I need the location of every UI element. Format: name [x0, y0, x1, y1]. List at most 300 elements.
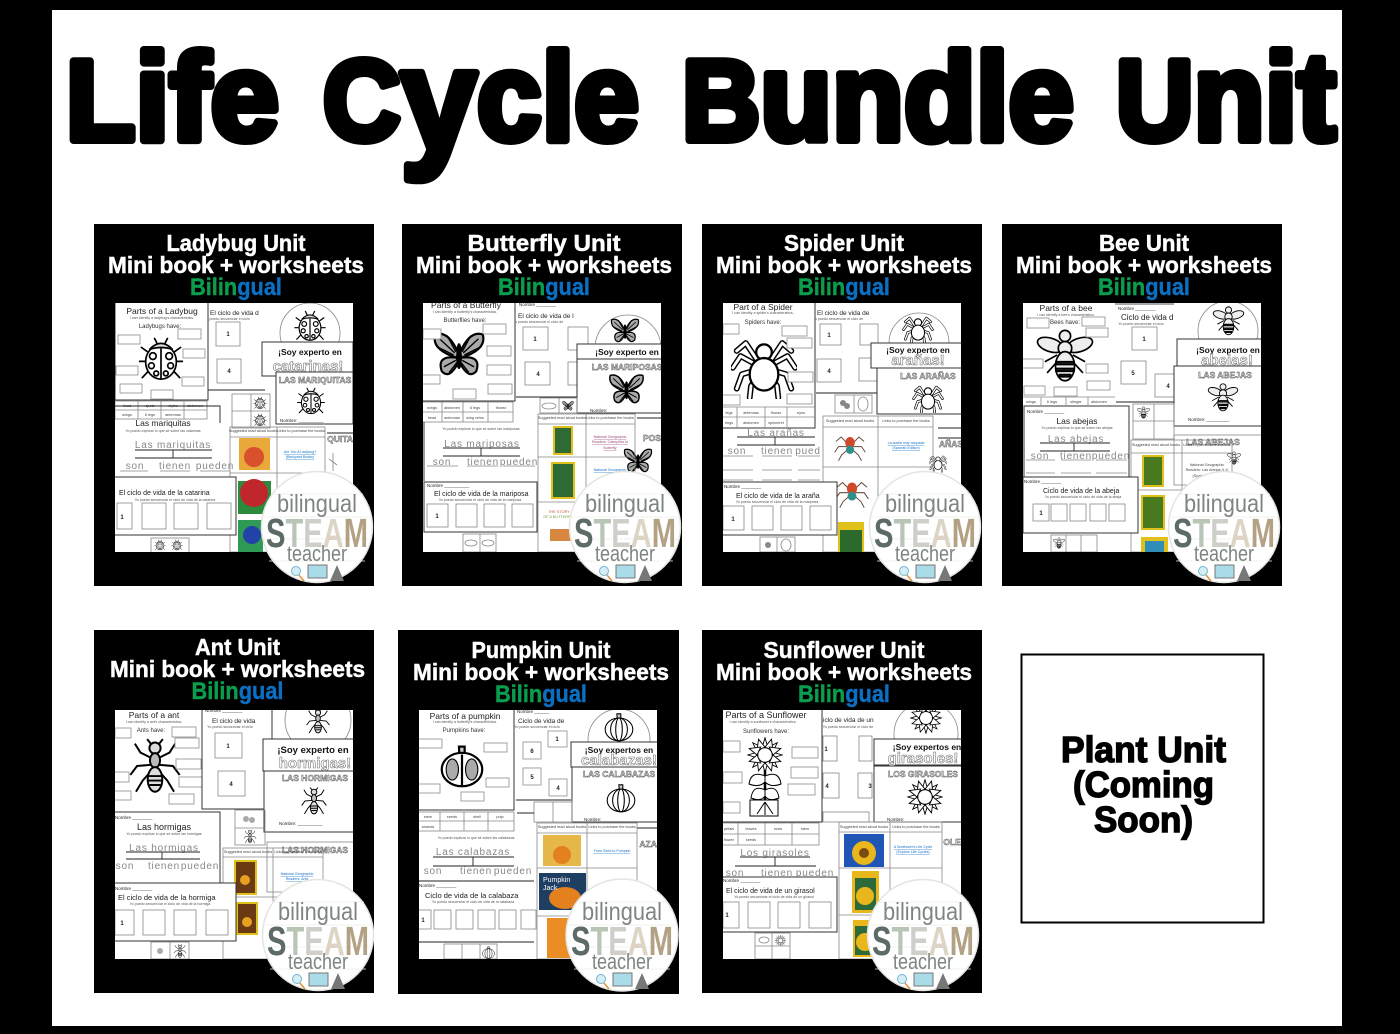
logo: Bilingual STEAM Teacher: STEAM [574, 510, 676, 556]
cycle strip sheet: Yo puedo secuenciar el ciclo de vida de la abeja [1045, 495, 1121, 499]
life cycle sheet: El ciclo de vida [212, 718, 256, 725]
logo: Bilingual STEAM Teacher [566, 879, 678, 991]
tracing sheet: Las hormigas [129, 843, 199, 854]
logo: Bilingual STEAM Teacher [262, 472, 372, 582]
parts worksheet [115, 302, 208, 400]
card: Ladybug Unit [94, 224, 374, 586]
books table: Butterfly [603, 446, 617, 450]
mini book cover: arañas! [891, 352, 945, 369]
tracing sheet: pueden [796, 868, 834, 879]
vocabulary table: abdomen [444, 406, 460, 410]
card heading: Bilingual [498, 274, 590, 301]
logo: Bilingual STEAM Teacher [1168, 472, 1280, 582]
life cycle sheet [513, 302, 588, 397]
tracing sheet: son [433, 457, 451, 468]
life cycle sheet: 1 [555, 737, 559, 743]
parts worksheet: antennas [743, 411, 759, 415]
life cycle sheet: Yo puedo secuenciar el ciclo [1118, 322, 1164, 326]
logo: Bilingual STEAM Teacher: teacher [1194, 541, 1254, 566]
parts worksheet: Parts of a bee [1040, 303, 1093, 313]
vocabulary table [422, 402, 513, 422]
vocabulary table: head [123, 404, 131, 408]
life cycle sheet: 4 [1166, 384, 1170, 390]
books table: Links to purchase the books [277, 429, 325, 433]
tracing sheet: tienen [159, 461, 191, 472]
books table: Readers: Las Abejas (L1) [1186, 468, 1229, 472]
books table: A Sunflower's Life Cycle [894, 845, 932, 849]
mini book cover: LAS MARIPOSAS [592, 362, 663, 372]
logo: Bilingual STEAM Teacher: STEAM [267, 918, 369, 964]
panel: Plant Unit coming soon: Plant Unit [1061, 729, 1226, 770]
books table [839, 822, 942, 959]
life cycle sheet: 1 [827, 333, 831, 339]
life cycle sheet: iclo de vida de un [823, 717, 874, 724]
panel: Plant Unit coming soon: (Coming [1073, 764, 1214, 805]
mini book cover: LAS HORMIGAS [282, 773, 348, 783]
logo: Bilingual STEAM Teacher: bilingual [277, 490, 357, 518]
life cycle sheet: 4 [536, 372, 540, 378]
card heading: Bilingual [1098, 274, 1190, 301]
card heading: Bilingual [798, 681, 890, 708]
tracing sheet: pueden [500, 457, 538, 468]
mini book cover [874, 702, 964, 822]
mini book cover: Nombre: _________ [584, 817, 626, 822]
books table: Suggested read aloud books [840, 825, 888, 829]
cycle strip sheet: Nombre ________ [723, 878, 761, 883]
tracing sheet: Las abejas [1056, 416, 1098, 426]
card heading: Bilingual [798, 274, 890, 301]
right edge worksheet: LAS ABEJAS [1186, 437, 1240, 447]
tracing sheet: pueden [181, 861, 219, 872]
books table: Links to purchase the books [586, 416, 634, 420]
vocabulary table: abdomen [187, 404, 203, 408]
card heading: Mini book + worksheets [716, 252, 972, 278]
mini book cover: Nombre: [887, 817, 904, 822]
right edge worksheet [943, 822, 967, 847]
parts worksheet: I can identify a ladybug's characteristics. [130, 316, 194, 320]
mini book cover: ¡Soy expertos en [585, 745, 653, 755]
card heading [716, 230, 972, 301]
mini book cover [577, 315, 667, 413]
life cycle sheet [202, 707, 272, 809]
card heading: Bilingual [190, 274, 282, 301]
books table: Jack [543, 885, 558, 892]
logo: Bilingual STEAM Teacher: teacher [893, 949, 953, 974]
cycle strip sheet [1023, 477, 1138, 552]
books table: National Geographic [1190, 463, 1224, 467]
tracing sheet: son [1031, 451, 1049, 462]
parts worksheet [720, 299, 815, 428]
life cycle sheet: Yo puedo secuenciar el ciclo [204, 317, 250, 321]
card heading [110, 634, 365, 705]
mini book cover: ¡Soy experto en [595, 347, 659, 357]
card: Bee Unit [1002, 224, 1282, 586]
life cycle sheet: 1 [226, 744, 230, 750]
cycle strip sheet: Ciclo de vida de la calabaza [425, 891, 519, 900]
parts worksheet: rings [725, 421, 733, 425]
logo: Bilingual STEAM Teacher: bilingual [582, 898, 662, 926]
parts worksheet: I can identify a butterfly's characteristics. [433, 310, 497, 314]
parts worksheet: Bees have: [1050, 320, 1080, 326]
parts worksheet: eyes [797, 411, 805, 415]
logo: Bilingual STEAM Teacher: STEAM [872, 918, 974, 964]
mini book cover: Nombre: _________ [1188, 417, 1230, 422]
vocabulary table [1023, 397, 1115, 405]
picture cards [1133, 404, 1174, 439]
logo: Bilingual STEAM Teacher [570, 472, 680, 582]
life cycle sheet: Yo puedo secuenciar el ciclo de [813, 317, 863, 321]
tracing sheet: son [116, 861, 134, 872]
right edge worksheet: AÑAS [939, 439, 963, 449]
parts worksheet [420, 299, 515, 401]
title: Bundle [682, 29, 1074, 167]
cycle strip sheet: Yo puedo secuenciar el ciclo de vida de la mariposa [736, 500, 818, 504]
books table [1131, 440, 1232, 552]
cycle strip sheet: El ciclo de vida de la araña [736, 493, 820, 500]
books table: Suggested read aloud books [538, 416, 586, 420]
life cycle sheet: 4 [227, 369, 231, 375]
vocabulary table: wing veins [466, 416, 484, 420]
card heading [413, 637, 669, 708]
life cycle sheet: Nombre ______ [517, 709, 550, 714]
right edge worksheet: OLES [943, 837, 967, 847]
parts worksheet: Ants have: [137, 728, 166, 734]
tracing sheet: Yo puedo explicar lo que sé sobre las calabazas [438, 836, 515, 840]
life cycle sheet: 5 [1131, 371, 1135, 377]
mini book cover [871, 313, 963, 414]
parts worksheet: Spiders have: [745, 320, 782, 326]
books table: (Spanish Edition) [892, 446, 920, 450]
mini book cover: girasoles! [888, 750, 958, 767]
mini book cover: LAS ARAÑAS [900, 371, 956, 381]
card: Spider Unit [702, 224, 982, 586]
vocabulary table: shell [473, 815, 481, 819]
logo: Bilingual STEAM Teacher: bilingual [885, 490, 965, 518]
title: C [323, 38, 400, 165]
vocabulary table: leaves [746, 827, 757, 831]
life cycle sheet [514, 709, 571, 800]
life cycle sheet [1115, 304, 1180, 402]
life cycle sheet: El ciclo de vida de l [518, 313, 574, 320]
vocabulary table: petals [724, 827, 734, 831]
tracing sheet: Las mariposas [444, 439, 520, 450]
vocabulary table: antennas [444, 416, 460, 420]
parts worksheet: abdomen [743, 421, 759, 425]
life cycle sheet: 1 [824, 747, 828, 753]
books table: National Geographic [594, 435, 627, 439]
vocabulary table: elytra [168, 404, 179, 408]
tracing sheet: tienen [148, 861, 180, 872]
mini book cover: catarinas! [273, 358, 343, 375]
card heading: Butterfly Unit [468, 230, 621, 256]
mini book cover: LAS ABEJAS [1198, 370, 1252, 380]
books table [823, 416, 933, 552]
vocabulary table: 6 legs [1047, 400, 1057, 404]
books table: Suggested read aloud books [224, 850, 272, 854]
books table: Suggested read aloud books [826, 419, 874, 423]
vocabulary table: 6 legs [470, 406, 480, 410]
cycle strip sheet: Nombre ________ [419, 883, 457, 888]
life cycle sheet: Nombre ________ [519, 302, 557, 307]
parts worksheet: Parts of a Ladybug [126, 306, 198, 316]
worksheet collage [420, 299, 667, 552]
picture cards [835, 395, 872, 413]
tracing sheet: Las mariquitas [135, 418, 191, 428]
tracing sheet: Las hormigas [137, 822, 192, 832]
tracing sheet [1024, 406, 1130, 477]
tracing sheet: Nombre ________ [115, 815, 153, 820]
card heading: Bee Unit [1099, 230, 1189, 256]
picture cards [235, 810, 265, 845]
vocabulary table: wings [427, 406, 437, 410]
logo: Bilingual STEAM Teacher [868, 880, 978, 990]
title: Unit [1116, 29, 1336, 167]
tracing sheet: pued [795, 446, 821, 457]
tracing sheet: tienen [460, 866, 492, 877]
parts worksheet: Butterflies have: [443, 318, 487, 324]
cycle strip sheet: Nombre ________ [1024, 479, 1062, 484]
vocabulary table: seeds [447, 815, 457, 819]
tracing sheet: Yo puedo explicar lo que sé sobre las hormigas [126, 832, 202, 836]
books table: (Backyard Books) [286, 455, 314, 459]
card heading [716, 637, 972, 708]
card heading: Mini book + worksheets [1016, 252, 1272, 278]
books table: Links to purchase the books [892, 825, 940, 829]
card: Sunflower Unit [702, 630, 982, 993]
mini book cover: ¡Soy experto en [277, 745, 349, 756]
life cycle sheet: 1 [226, 332, 230, 338]
books table: Suggested read aloud books [538, 825, 586, 829]
right edge worksheet [624, 418, 667, 472]
life cycle sheet: Ciclo de vida de [518, 718, 565, 725]
parts worksheet: Parts of a Sunflower [725, 710, 807, 720]
books table: OF A BUTTERFLY [543, 515, 575, 519]
tracing sheet: son [726, 868, 744, 879]
life cycle sheet: Ciclo de vida d [1121, 313, 1173, 322]
mini book cover: ¡Soy experto en [278, 347, 342, 357]
parts worksheet: Pumpkins have: [443, 728, 486, 734]
card heading [108, 230, 364, 301]
mini book cover: Nombre: __________ [279, 821, 323, 826]
tracing sheet [726, 848, 834, 879]
books table: (Spanish Edition) [1193, 474, 1222, 478]
vocabulary table: stem [801, 827, 809, 831]
title: y [400, 18, 477, 181]
right edge worksheet: LAS HORMIGAS [282, 845, 348, 855]
logo: Bilingual STEAM Teacher: bilingual [883, 898, 963, 926]
vocabulary table [722, 823, 819, 845]
vocabulary table: abdomen [1091, 400, 1107, 404]
life cycle sheet: Nombre ________ [1118, 306, 1156, 311]
vocabulary table: roots [774, 827, 782, 831]
card heading: Mini book + worksheets [110, 656, 365, 682]
cycle strip sheet: Ciclo de vida de la abeja [1043, 488, 1119, 495]
vocabulary table: wings [1026, 400, 1036, 404]
panel: Plant Unit coming soon: Soon) [1094, 799, 1193, 840]
card: Ant Unit [94, 630, 374, 993]
picture cards [823, 812, 869, 822]
logo: Bilingual STEAM Teacher: bilingual [278, 898, 358, 926]
parts worksheet: spinneret [768, 421, 785, 425]
vocabulary table: flower [724, 838, 735, 842]
title: Life [66, 29, 279, 167]
life cycle sheet: 4 [229, 782, 233, 788]
tracing sheet [114, 812, 220, 883]
mini book cover: ¡Soy experto en [886, 345, 950, 355]
vocabulary table: stem [424, 815, 432, 819]
life cycle sheet: 4 [556, 786, 560, 792]
cycle strip sheet: Yo puedo secuenciar el ciclo de vida de la catarina [135, 498, 215, 502]
life cycle sheet: Yo puedo secuenciar el ciclo de [823, 725, 873, 729]
tracing sheet: tienen [761, 446, 793, 457]
parts worksheet [416, 707, 514, 810]
card heading: Bilingual [192, 678, 284, 705]
vocabulary table: seeds [746, 838, 756, 842]
books table [223, 848, 323, 959]
mini book cover [262, 303, 353, 424]
vocabulary table: thorax [496, 406, 506, 410]
panel: Plant Unit coming soon [1022, 654, 1264, 922]
parts worksheet: I can identify a bee's characteristics. [1037, 313, 1095, 317]
life cycle sheet: El ciclo de vida de [817, 310, 870, 317]
logo: Bilingual STEAM Teacher: STEAM [1173, 510, 1275, 556]
cycle strip sheet: 1 [731, 517, 735, 523]
logo: Bilingual STEAM Teacher: STEAM [266, 510, 368, 556]
cycle strip sheet: Nombre __________ [427, 483, 470, 488]
mini book cover: abejas! [1201, 352, 1253, 369]
life cycle sheet: Yo puedo secuenciar el ciclo [207, 725, 253, 729]
tracing sheet [723, 428, 821, 480]
cycle strip sheet [416, 881, 536, 959]
picture cards [540, 398, 577, 413]
logo: Bilingual STEAM Teacher [870, 472, 980, 582]
right edge worksheet: QUITAS [327, 434, 359, 444]
logo: Bilingual STEAM Teacher: teacher [895, 541, 955, 566]
life cycle sheet [204, 310, 265, 390]
vocabulary table [115, 401, 207, 419]
books table: National Geographic [281, 872, 314, 876]
card heading: Ladybug Unit [166, 230, 306, 256]
logo: Bilingual STEAM Teacher [262, 880, 374, 990]
parts worksheet: Part of a Spider [733, 302, 793, 312]
life cycle sheet: 4 [827, 369, 831, 375]
mini book cover: LOS GIRASOLES [888, 769, 958, 779]
books table: Links to purchase the books [882, 419, 930, 423]
cycle strip sheet [424, 482, 537, 552]
tracing sheet [424, 813, 534, 877]
books table: National Geographic [594, 468, 627, 472]
card heading: Bilingual [495, 681, 587, 708]
tracing sheet: pueden [196, 461, 234, 472]
books table [537, 823, 637, 959]
worksheet collage [1020, 301, 1265, 552]
tracing sheet: Las arañas [747, 428, 805, 439]
tracing sheet: Los girasoles [740, 848, 810, 859]
tracing sheet [115, 406, 234, 472]
card heading [416, 230, 672, 301]
tracing sheet: Yo puedo explicar lo que sé sobre las abejas [1041, 426, 1113, 430]
parts worksheet: thorax [771, 411, 781, 415]
vocabulary table: wings [122, 413, 132, 417]
card heading: Mini book + worksheets [108, 252, 364, 278]
logo: Bilingual STEAM Teacher: teacher [592, 949, 652, 974]
life cycle sheet: 3 [868, 784, 872, 790]
cycle strip sheet: 1 [725, 913, 729, 919]
life cycle sheet: 6 [530, 749, 534, 755]
books table: La araña muy ocupada [888, 441, 924, 445]
cycle strip sheet: El ciclo de vida de la mariposa [434, 491, 529, 498]
mini book cover: LAS CALABAZAS [583, 769, 655, 779]
tracing sheet: Las calabazas [436, 847, 510, 858]
worksheet collage [416, 707, 663, 959]
parts worksheet: Sunflowers have: [743, 729, 789, 735]
cycle strip sheet: Yo puedo secuenciar el ciclo de vida de la calabaza [432, 900, 514, 904]
parts worksheet [112, 710, 202, 804]
logo: Bilingual STEAM Teacher: STEAM [874, 510, 976, 556]
cycle strip sheet: 1 [1039, 511, 1043, 517]
right edge worksheet [929, 428, 963, 472]
cycle strip sheet: El ciclo de vida de un girasol [726, 888, 815, 895]
right edge worksheet [637, 828, 663, 849]
life cycle sheet: Yo puedo secuenciar el ciclo [514, 725, 560, 729]
parts worksheet: legs [726, 411, 733, 415]
vocabulary table: head [428, 416, 436, 420]
cycle strip sheet [722, 482, 837, 552]
mini book cover [263, 687, 355, 832]
tracing sheet: pueden [1092, 451, 1130, 462]
parts worksheet: I can identify a sunflower's characteristics. [730, 720, 797, 724]
life cycle sheet: Yo puedo secuenciar el ciclo de [513, 320, 563, 324]
vocabulary table: spots [145, 404, 155, 408]
logo: Bilingual STEAM Teacher: teacher [287, 541, 347, 566]
tracing sheet: Yo puedo explicar lo que sé sobre las catarinas [125, 429, 201, 433]
card heading: Pumpkin Unit [472, 637, 611, 663]
parts worksheet [1020, 303, 1110, 396]
tracing sheet: son [424, 866, 442, 877]
worksheet collage [720, 299, 963, 552]
vocabulary table: 6 legs [145, 413, 155, 417]
mini book cover: ¡Soy expertos en [893, 742, 961, 752]
parts worksheet: I can identify a butterfly's characteristics. [433, 720, 497, 724]
books table: Links to purchase the books [588, 825, 636, 829]
vocabulary table: pulp [496, 815, 504, 819]
tracing sheet: tienen [467, 457, 499, 468]
logo: Bilingual STEAM Teacher: bilingual [585, 490, 665, 518]
mini book cover [571, 709, 659, 822]
vocabulary table: stinger [1070, 400, 1082, 404]
cycle strip sheet: 1 [120, 921, 124, 927]
tracing sheet: tienen [761, 868, 793, 879]
mini book cover: Nombre: __________ [590, 408, 634, 413]
books table: Suggested read aloud books [229, 429, 277, 433]
books table: Pumpkin [543, 877, 570, 884]
tracing sheet: Nombre ________ [1027, 409, 1065, 414]
cycle strip sheet: Yo puedo secuenciar el ciclo de vida de la mariposa [439, 498, 521, 502]
parts worksheet: Ladybugs have: [139, 324, 182, 330]
cycle strip sheet: Nombre ________ [724, 484, 762, 489]
books table: Links to purchase the books [1183, 443, 1231, 447]
books table: Suggested read aloud books [1132, 443, 1180, 447]
books table: (Explore Life Cycles) [896, 850, 930, 854]
right edge worksheet [327, 432, 353, 471]
vocabulary table: antennas [165, 413, 181, 417]
books table: Links to purchase the books [274, 850, 322, 854]
books table: Readers: Caterpillar to [592, 440, 628, 444]
card heading: Sunflower Unit [764, 637, 925, 663]
life cycle sheet: 1 [1142, 337, 1146, 343]
title [66, 18, 1336, 181]
card heading [1016, 230, 1272, 301]
